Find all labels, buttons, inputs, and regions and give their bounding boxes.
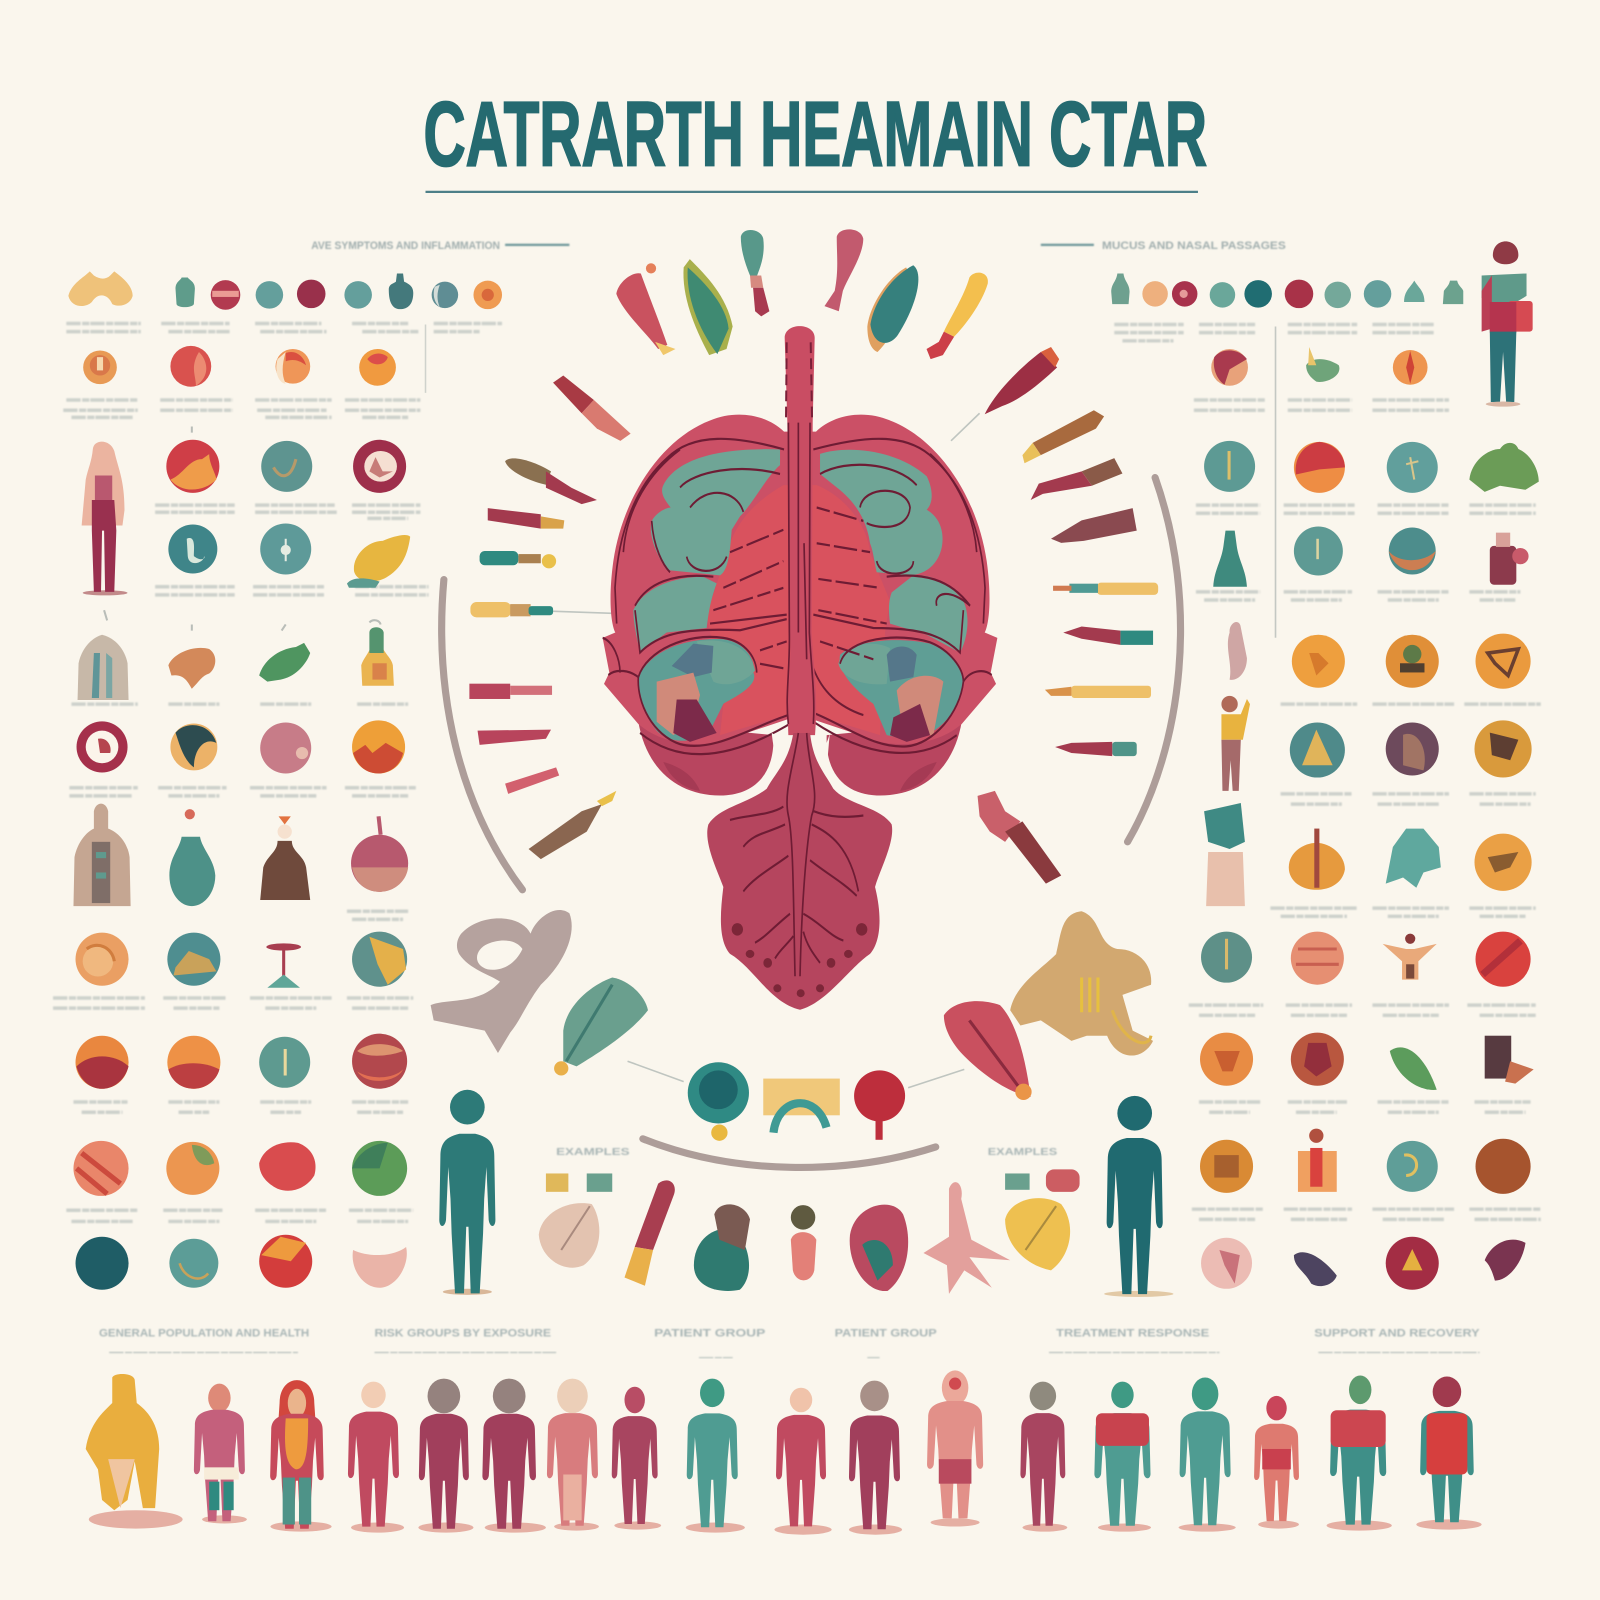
icon: teal disc (1204, 441, 1255, 492)
person 9: teal (686, 1379, 745, 1533)
icon: orange red disc (167, 1036, 220, 1089)
icon: teal disc (1387, 1141, 1438, 1192)
icon: teal bottle (1111, 273, 1130, 304)
limb: red blob (978, 791, 1061, 884)
person 15 (1179, 1378, 1236, 1532)
limbs fan top (553, 229, 1059, 441)
icon: red orange disc (76, 1036, 129, 1089)
shape: crimson organ (850, 1205, 908, 1291)
icon: dark brown box (1485, 1036, 1534, 1084)
row icons left 1145 (73, 1141, 407, 1196)
icon: dark teal disc (76, 1237, 129, 1290)
icon: maroon kit (1490, 533, 1529, 585)
central row: teal disc gold (688, 1062, 749, 1141)
icon: orange disc (473, 281, 502, 309)
bottom headings: SUPPORT AND RECOVERY (1314, 1328, 1480, 1340)
icon: orange disc (1474, 834, 1532, 891)
person 10 (774, 1388, 832, 1535)
row icons left 540 (168, 523, 410, 588)
row icons left 457 (166, 440, 406, 493)
icon: teal disc (256, 281, 283, 309)
shape: limb (624, 1180, 675, 1286)
icon: coral blob (259, 1142, 316, 1191)
icon: orange disc (83, 351, 117, 384)
icon: mauve disc (260, 722, 311, 773)
row icons right 457 (1204, 441, 1539, 493)
icon: teal gold disc (1290, 722, 1345, 778)
central organ (603, 326, 997, 1010)
icon: teal disc (259, 1037, 310, 1088)
icon: orange disc (352, 720, 405, 773)
person 14 (1094, 1382, 1151, 1532)
person 13 (1020, 1382, 1067, 1532)
icon: teal disc (261, 441, 312, 492)
row icons right 360 (1211, 347, 1428, 386)
icon: teal gold disc (167, 933, 220, 986)
icon: teal shape (1386, 829, 1441, 888)
small marks between rows (104, 427, 381, 631)
limb: crimson yellow (488, 508, 564, 529)
lung lobe left (603, 415, 793, 795)
limb: crimson teal (1063, 627, 1153, 645)
icon: crimson disc (1285, 280, 1313, 308)
limb: green leaf (683, 259, 733, 355)
icon: yellow pelvis blob (68, 271, 133, 306)
leader line right (1275, 327, 1277, 638)
icon: teal disc (1210, 282, 1235, 308)
icon: orange disc with red (359, 349, 396, 386)
icon: brown disc (1476, 1139, 1531, 1194)
row icons right 1238 (1201, 1237, 1526, 1290)
icon: red disc (170, 346, 211, 387)
row icons right 540 (1213, 527, 1529, 587)
person 11 (849, 1381, 902, 1535)
row icons right 938 (1201, 932, 1531, 987)
lower organ veins (730, 733, 863, 976)
section heading left: AVE SYMPTOMS AND INFLAMMATION (311, 240, 500, 252)
icon: small figure (1221, 696, 1250, 791)
bottom headings: GENERAL POPULATION AND HEALTH (99, 1328, 309, 1340)
person 2: pink (194, 1384, 247, 1523)
small label left: EXAMPLES (556, 1147, 630, 1158)
icon: green disc (352, 1141, 407, 1196)
person 16 (1254, 1396, 1299, 1529)
bottom headings: TREATMENT RESPONSE (1056, 1328, 1210, 1340)
bottom headings: PATIENT GROUP (835, 1328, 937, 1340)
shape: mauve swirl (431, 910, 572, 1053)
bottom sublines (109, 1352, 1480, 1358)
limb: teal yellow (480, 551, 556, 568)
limb: yellow teal (1053, 583, 1158, 595)
icon: stool (266, 943, 301, 988)
icon: orange brown disc (1200, 1140, 1253, 1193)
small label right: EXAMPLES (988, 1147, 1057, 1158)
figure: woman with red bag (1482, 241, 1533, 407)
row icons left 732 (77, 720, 405, 773)
row icons left 845 (73, 804, 408, 906)
lower organ pores (732, 923, 867, 997)
row icons left 360 (83, 346, 396, 387)
small icons left (546, 1173, 612, 1192)
green lobes left (633, 449, 780, 653)
person 3: red hair (270, 1380, 332, 1532)
bottom headings: RISK GROUPS BY EXPOSURE (374, 1328, 552, 1340)
icon: teal gold disc (352, 932, 407, 987)
icon: peach red disc (276, 349, 310, 384)
arc left (442, 580, 522, 890)
icon: dark blob (1294, 1252, 1337, 1286)
icon: orange figure (1298, 1129, 1337, 1192)
coral centre (707, 485, 890, 735)
icon: crimson disc white (353, 440, 406, 493)
icon: green leaf (1390, 1047, 1437, 1090)
icon: teal disc (1387, 442, 1438, 493)
icon: yellow bottle (361, 627, 394, 686)
icon: crimson disc (1172, 281, 1197, 307)
icon: orange disc (1200, 1033, 1253, 1086)
shape: small pink (791, 1205, 816, 1280)
top dots row right (1111, 273, 1463, 308)
limb: teal leaf (867, 265, 918, 352)
person 12 (927, 1370, 983, 1527)
icon: teal disc (344, 281, 372, 309)
icon: beige statue (73, 804, 131, 906)
row icons left 650 (78, 627, 394, 700)
icon: red disc (1476, 932, 1531, 987)
icon: dark blob (1485, 1240, 1526, 1281)
icon: dark orange disc (170, 723, 217, 770)
limb: brown crimson (505, 458, 597, 504)
icon: teal dress (1213, 531, 1247, 587)
limb: brown yellow (1022, 410, 1104, 463)
figure: teal right (1104, 1096, 1173, 1297)
icon: teal disc (1294, 527, 1343, 576)
limb: crimson (985, 347, 1059, 414)
icon: green bottle (1443, 281, 1463, 304)
shape: yellow shell (1005, 1198, 1070, 1270)
limb: crimson brown (1031, 458, 1122, 500)
anatomy lines left (603, 439, 793, 754)
icon: orange green disc (166, 1142, 219, 1195)
icon: red orange disc (259, 1235, 312, 1288)
person 18 (1416, 1377, 1482, 1530)
icon: dark teal disc (1244, 280, 1272, 308)
icon: peach disc (1142, 281, 1168, 307)
person 1: yellow robe (86, 1374, 183, 1529)
icon: green blob (1469, 443, 1539, 492)
bottom headings (99, 1328, 1480, 1340)
icon: crimson disc (211, 280, 240, 310)
top dots row left (176, 273, 502, 310)
figure: woman left (82, 442, 128, 595)
icon: statue (1204, 803, 1245, 906)
icon: pink disc (353, 1247, 407, 1288)
limbs right side (978, 410, 1158, 884)
leader line left (425, 324, 427, 393)
icon: red orange disc (166, 440, 219, 493)
icon: small figure (1383, 934, 1437, 980)
row icons right 845 (1204, 803, 1532, 906)
icon: teal disc (1364, 280, 1391, 308)
limb: orange teal (470, 602, 553, 617)
icon: pink figure (1228, 622, 1247, 680)
small icons right (1005, 1169, 1080, 1192)
icon: brown red disc (352, 1034, 407, 1089)
person 17 (1327, 1376, 1392, 1531)
limb: crimson pink (469, 684, 552, 699)
icon: teal bottle (1404, 281, 1424, 302)
row icons right 733 (1221, 696, 1532, 791)
arc right (1128, 478, 1181, 842)
limb: brown yellow (529, 791, 616, 859)
shape: teal leaf (554, 978, 648, 1076)
gaps (772, 733, 830, 773)
limb: teal crimson (741, 230, 769, 316)
green lobes right (820, 450, 967, 653)
bottom row of people (86, 1370, 1482, 1535)
icon: brown gold disc (1474, 720, 1532, 778)
icon: orange disc (1476, 634, 1531, 689)
icon: white crimson ring (77, 721, 128, 772)
shape: beige shell (539, 1203, 599, 1268)
lower organ (707, 733, 892, 1010)
icon: orange disc (76, 933, 129, 986)
captions left block (53, 323, 502, 1221)
title underline (426, 191, 1198, 193)
limb: red coral left (553, 376, 631, 441)
person 7 (547, 1379, 599, 1531)
icon: maroon disc (297, 280, 326, 308)
limb: crimson brown (1051, 508, 1137, 543)
limb: pink (505, 767, 559, 794)
icon: teal disc (1324, 282, 1351, 308)
icon: yellow blob (347, 535, 410, 588)
icon: pink disc (1201, 1238, 1252, 1289)
limb: yellow red (927, 273, 988, 359)
person 6 (482, 1379, 546, 1533)
icon: green blob (1306, 347, 1339, 382)
person 4 (348, 1382, 404, 1533)
row icons left 1238 (76, 1235, 407, 1290)
central row: red disc (854, 1070, 905, 1140)
limb: yellow (1045, 686, 1151, 698)
icon: teal bottle (169, 809, 215, 906)
icon: teal orange disc (1389, 528, 1436, 574)
central row: yellow box (763, 1079, 840, 1133)
lower pocket right (838, 640, 963, 742)
figure: teal left (439, 1090, 495, 1295)
lower pocket left (638, 639, 755, 742)
connector lines (551, 413, 980, 1088)
row icons left 940 (76, 932, 407, 988)
bottom headings: PATIENT GROUP (654, 1328, 766, 1340)
shape: pink star (923, 1182, 1010, 1294)
shape: red leaf (944, 1001, 1032, 1100)
row icons right 650 (1228, 622, 1531, 689)
person 5 (418, 1379, 473, 1533)
icon: red orange disc (1294, 442, 1345, 493)
icon: brown red disc (1291, 1033, 1344, 1086)
icon: orange disc (1292, 635, 1345, 688)
anatomy lines right (813, 439, 992, 753)
icon: brown blob (168, 648, 215, 689)
section heading right: MUCUS AND NASAL PASSAGES (1102, 240, 1286, 252)
icon: orange figure (1289, 829, 1345, 890)
icon: teal bottle (176, 278, 195, 307)
person 8 (612, 1387, 661, 1530)
shape: dark organ (694, 1204, 750, 1291)
icon: teal disc (169, 1239, 218, 1288)
icon: green turtle (259, 643, 310, 682)
spine (785, 326, 816, 735)
icon: teal disc (168, 524, 217, 573)
icon: coral disc (1291, 932, 1344, 985)
icon: crimson disc (1386, 1237, 1439, 1290)
limb: rose (824, 229, 863, 311)
limb: red (616, 263, 676, 355)
row icons left 1040 (76, 1034, 407, 1089)
icon: orange disc (1393, 350, 1428, 385)
shape: tan figure (1010, 911, 1153, 1056)
limb: teal crimson (1055, 742, 1137, 756)
limb: crimson pink (478, 730, 551, 745)
captions right block (1114, 324, 1541, 1219)
icon: teal disc (1201, 932, 1252, 983)
icon: brown disc (1386, 722, 1439, 776)
row icons right 1038 (1200, 1033, 1534, 1090)
icon: dark teal bottle (389, 273, 413, 309)
row icons right 1143 (1200, 1129, 1531, 1194)
lower row of organs (539, 1180, 1070, 1294)
limbs left side (469, 458, 616, 859)
arc bottom (643, 1139, 936, 1167)
icon: hooded figure (78, 635, 129, 700)
lung lobe right (807, 415, 997, 795)
icon: coral disc (73, 1141, 129, 1196)
icon: orange dark disc (1386, 635, 1439, 688)
icon: teal disc (260, 523, 311, 574)
icon: brown figure (260, 816, 310, 900)
icon: grey teal disc (432, 282, 458, 308)
icon: crimson peach disc (1211, 349, 1248, 386)
icon: mauve disc (351, 816, 408, 892)
